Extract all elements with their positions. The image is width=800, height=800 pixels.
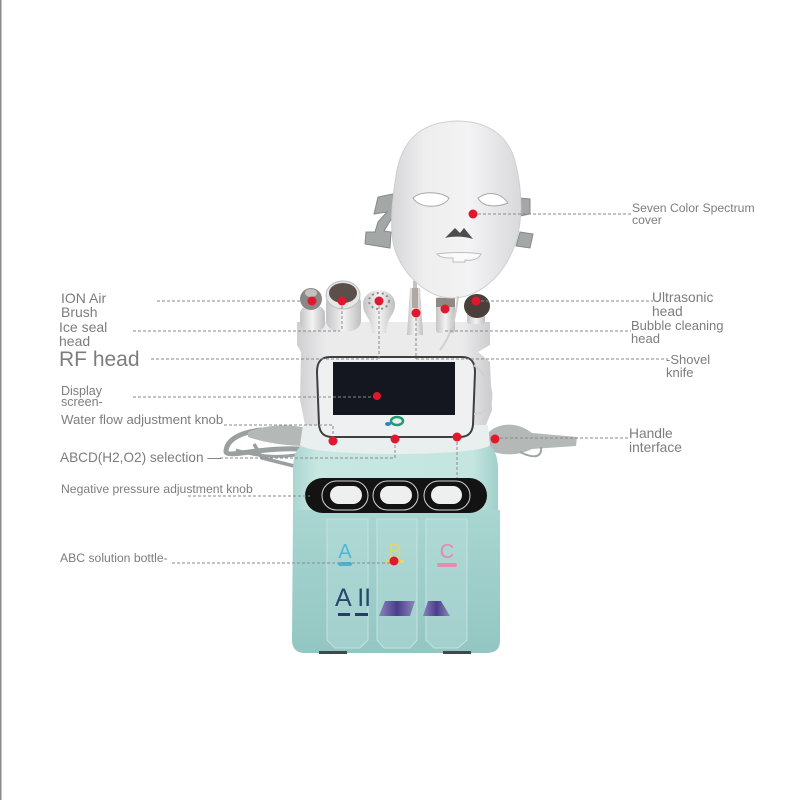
- main body upper: [293, 442, 498, 515]
- machine: [226, 121, 577, 654]
- label: Ice seal head: head: [59, 333, 90, 349]
- left handle grip: [248, 425, 307, 446]
- label: Display screen: Display: [61, 384, 103, 398]
- mask mouth: [437, 252, 481, 262]
- label: Bubble cleaning head: head: [631, 331, 660, 346]
- label: Ultrasonic head: Ultrasonic: [652, 290, 713, 305]
- label: Handle interface: interface: [629, 440, 682, 455]
- probe: ice seal head: [326, 281, 361, 331]
- label: Water flow adjustment knob: Water flow adjustment knob: [61, 412, 223, 427]
- knob 2: [373, 481, 418, 510]
- head straps: [365, 194, 533, 248]
- label: Seven Color Spectrum cover: cover: [632, 213, 662, 227]
- knob 1: [322, 481, 368, 510]
- labels right: [629, 201, 755, 455]
- touch screen frame: [317, 357, 475, 437]
- dashed leader lines: [133, 214, 668, 563]
- screen: [333, 362, 455, 415]
- probe: ion air brush: [300, 288, 325, 331]
- label: Ice seal head: Ice seal: [59, 319, 107, 335]
- tube from mask to probes: [440, 296, 458, 350]
- bottle label marks: [338, 601, 450, 616]
- label: Handle interface: Handle: [629, 426, 673, 441]
- probe: RF head: [363, 290, 395, 333]
- label: Negative pressure adjustment knob: Negative pressure adjustment knob: [61, 482, 253, 496]
- knob panel: [305, 478, 487, 513]
- white top band: [300, 425, 490, 454]
- mask eyes: [413, 193, 449, 206]
- label: ABCD selection: ABCD(H2,O2) selection —: [60, 450, 221, 465]
- probe: bubble cleaning head: [436, 297, 455, 333]
- bottle label text: A II: [335, 584, 371, 612]
- labels left: [59, 290, 253, 565]
- main body lower: [292, 510, 500, 653]
- probe: ultrasonic head: [464, 294, 490, 324]
- label: Shovel knife: knife: [666, 365, 693, 380]
- label: Display screen: screen-: [61, 395, 103, 409]
- bottle letter C: C: [440, 541, 454, 563]
- bottles: [327, 519, 467, 648]
- label: RF head: RF head: [59, 348, 140, 371]
- label: Ultrasonic head: head: [652, 304, 683, 319]
- label: ION Air Brush: Brush: [61, 304, 98, 320]
- label: Bubble cleaning head: Bubble cleaning: [631, 318, 724, 333]
- bottle letter C: [437, 541, 457, 567]
- right handle grip: [489, 425, 577, 454]
- label: Seven Color Spectrum cover: Seven Color Spectrum: [632, 201, 755, 215]
- bottle letter A: A: [338, 541, 352, 563]
- mask: [392, 121, 521, 298]
- red marker dots: [308, 210, 500, 566]
- label: Shovel knife: -Shovel: [666, 352, 710, 367]
- bottle letter B: B: [388, 541, 402, 563]
- knob 3: [424, 481, 470, 510]
- foot shadows: [319, 651, 347, 654]
- page left edge line: [0, 0, 2, 800]
- mask nose: [445, 228, 473, 239]
- label: ION Air Brush: ION Air: [61, 290, 106, 306]
- label: ABC solution bottle: ABC solution bottle-: [60, 551, 168, 565]
- white connector cable: [474, 365, 491, 414]
- tube handles left: [226, 430, 300, 466]
- white holder tray: [297, 322, 492, 425]
- probe: shovel knife: [407, 281, 423, 335]
- logo: [385, 417, 403, 426]
